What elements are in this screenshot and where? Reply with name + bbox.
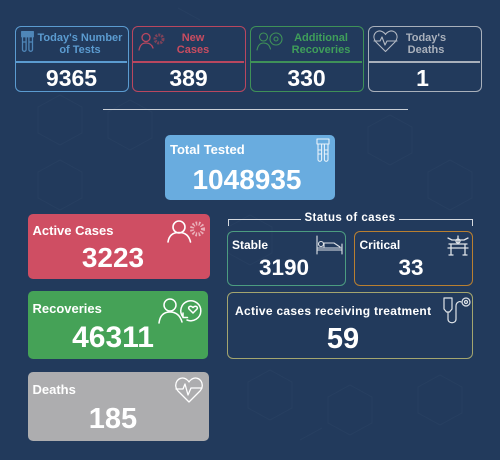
value: 3190 [259, 255, 309, 280]
value: 9365 [46, 65, 97, 91]
label: Active cases receiving treatment [235, 304, 431, 318]
icon: person with virus [167, 220, 205, 243]
panel: recoveries [28, 291, 208, 358]
heading: Recoveries [292, 44, 350, 56]
heading: Status of cases [304, 212, 396, 224]
panel: critical [354, 231, 473, 286]
panel: active cases receiving treatment [227, 292, 473, 359]
heading: Additional [294, 32, 348, 44]
card: today's deaths [368, 26, 482, 92]
value: 59 [327, 323, 359, 355]
icon: test tubes [316, 138, 330, 162]
label: Stable [232, 238, 268, 252]
icon: person recovering [256, 32, 282, 50]
divider line [103, 108, 408, 110]
heading [292, 32, 350, 56]
card: new cases [132, 26, 246, 92]
icon: person with heart [158, 298, 202, 324]
label: Deaths [32, 382, 76, 397]
label: Recoveries [32, 300, 102, 316]
label: Total Tested [170, 142, 245, 157]
value: 33 [398, 255, 424, 280]
heading: Deaths [408, 44, 444, 56]
value: 330 [287, 65, 326, 91]
heading [177, 32, 209, 56]
icon: heart with pulse [175, 377, 203, 403]
panel: total tested [165, 135, 335, 200]
panel: active cases [28, 214, 210, 278]
divider [369, 61, 480, 63]
bracket [228, 219, 473, 226]
heading: Today's Number [38, 32, 122, 44]
card: today's number of tests [15, 26, 129, 92]
value: 1 [416, 65, 429, 91]
icon: test tubes [21, 31, 34, 52]
panel: deaths [28, 372, 208, 440]
label: Critical [360, 238, 400, 252]
value: 1048935 [192, 164, 302, 195]
status of cases heading with bracket [228, 212, 473, 226]
icon: iv drip [443, 297, 471, 324]
icon: person with virus [138, 32, 164, 51]
heading: of Tests [59, 44, 101, 56]
card: additional recoveries [250, 26, 364, 92]
divider [16, 61, 127, 63]
heading [406, 32, 446, 56]
divider [251, 61, 362, 63]
icon: bed [316, 236, 343, 254]
value: 389 [169, 65, 208, 91]
heading: New [182, 32, 204, 44]
heading [38, 32, 122, 56]
value: 46311 [72, 321, 154, 354]
label: Active Cases [32, 222, 113, 238]
divider [133, 61, 244, 63]
heading: Cases [177, 44, 209, 56]
panel: stable [227, 231, 346, 286]
icon: heart with pulse [373, 30, 398, 52]
value: 185 [89, 403, 137, 435]
value: 3223 [82, 242, 144, 273]
heading: Today's [406, 32, 446, 44]
icon: operating bed [447, 235, 469, 256]
